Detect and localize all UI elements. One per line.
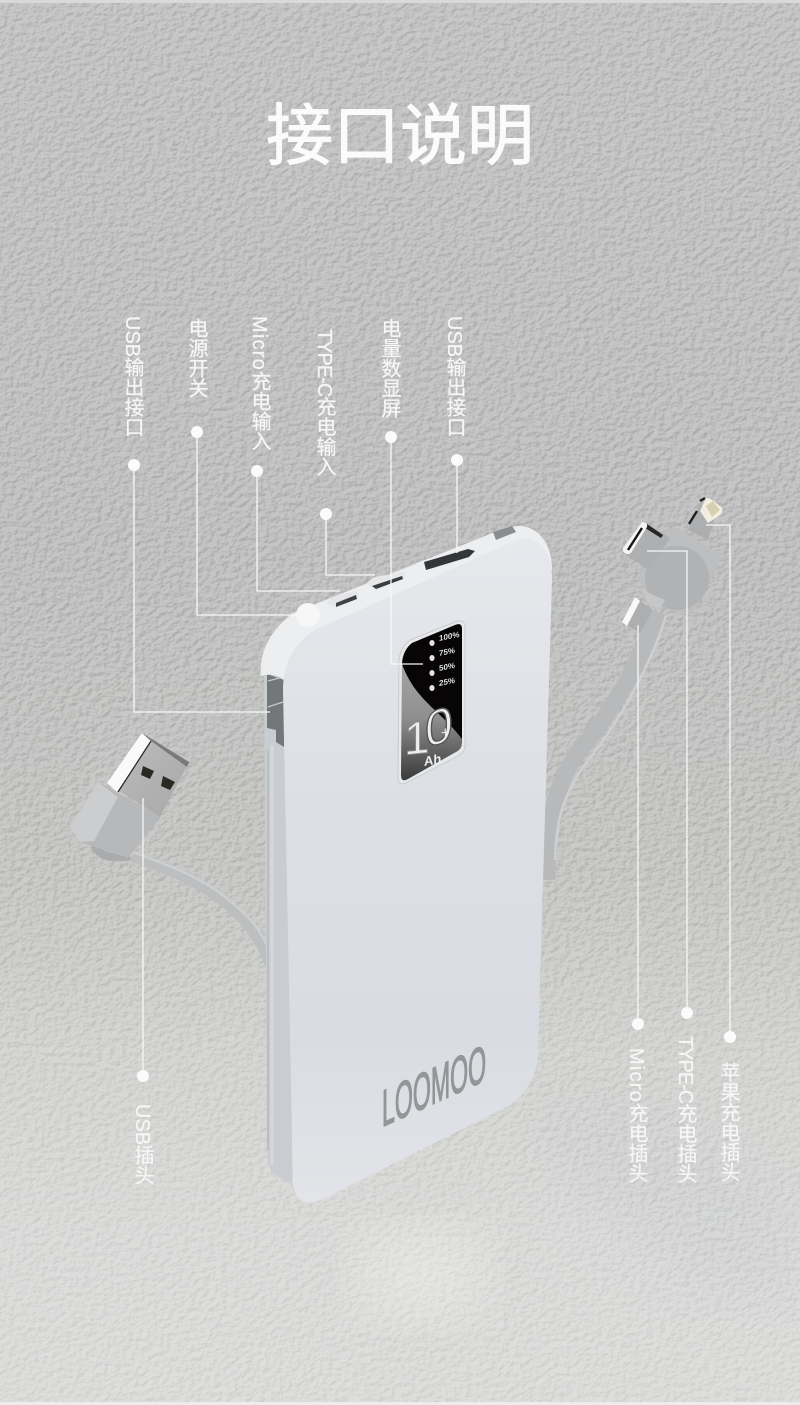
type-c tip (623, 522, 670, 570)
USB port (416, 544, 477, 570)
callout dots (128, 426, 736, 1082)
capacity text (404, 695, 453, 769)
battery indicators: 75% (439, 646, 455, 658)
display (398, 621, 465, 784)
USB plug (70, 733, 189, 858)
brand logo: LOOMOO (382, 1033, 486, 1138)
micro port (327, 591, 358, 607)
battery indicators (429, 630, 459, 691)
label: power switch: 电源开关 (185, 318, 207, 398)
capacity text: 0 (425, 695, 453, 759)
capacity text: + (441, 723, 450, 742)
lightning tip (688, 504, 716, 540)
front face (283, 539, 552, 1203)
capacity text: Ah (424, 751, 441, 769)
three-in-one connector head (622, 498, 722, 633)
label: Apple plug: 苹果充电插头 (717, 1062, 739, 1182)
callout lines (134, 432, 730, 1076)
right cable (547, 612, 666, 880)
label: TYPE-C charging input: TYPE-C 充电输入 (313, 329, 335, 476)
label: USB output right: USB输出接口 (443, 316, 465, 437)
label: Micro charging input: Micro 充电输入 (248, 316, 270, 451)
top shell (261, 526, 552, 680)
label: TYPE-C plug: TYPE-C 充电插头 (674, 1036, 696, 1183)
capacity text: 1 (404, 711, 430, 765)
label: USB plug: USB插头 (131, 1104, 153, 1185)
micro tip (622, 597, 653, 633)
side rail (264, 660, 292, 1185)
label: USB output left: USB输出接口 (121, 316, 143, 437)
hub body (640, 528, 720, 613)
left USB cable (95, 838, 290, 1040)
label: battery display: 电量数显屏 (378, 318, 400, 418)
battery indicators: 25% (439, 676, 455, 688)
port slot (267, 674, 284, 747)
battery indicators: 100% (439, 630, 459, 643)
power bank (261, 526, 552, 1203)
top notch (493, 526, 516, 540)
power button (296, 603, 320, 627)
battery indicators: 50% (439, 661, 455, 673)
type-c port (367, 572, 406, 590)
label: Micro plug: Micro 充电插头 (625, 1048, 647, 1183)
title: 接口说明 (266, 99, 534, 174)
